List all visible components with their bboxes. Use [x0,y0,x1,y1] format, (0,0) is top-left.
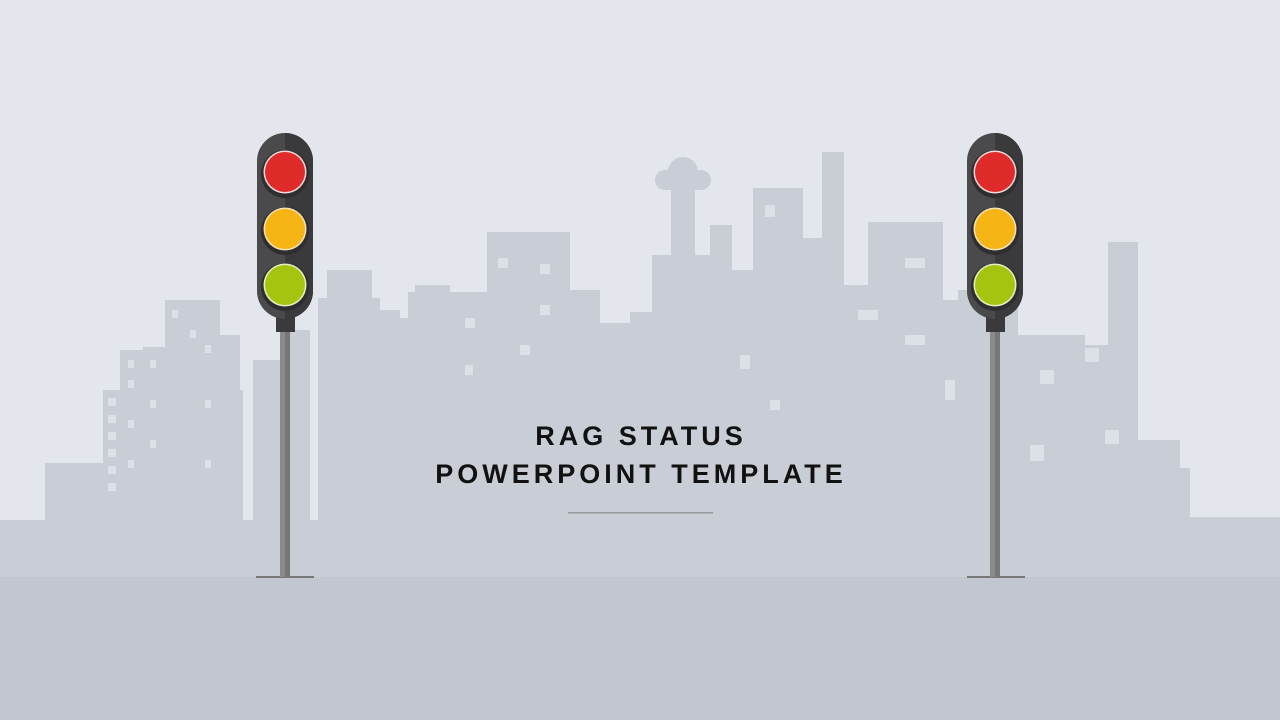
building windows [108,205,1119,491]
divider line under title [568,512,713,514]
title: RAG STATUS [535,421,747,451]
title: POWERPOINT TEMPLATE [435,459,847,489]
title [435,421,847,489]
skyline [0,152,1280,580]
traffic light: right [967,133,1025,578]
ground [0,577,1280,720]
traffic light: left [256,133,314,578]
